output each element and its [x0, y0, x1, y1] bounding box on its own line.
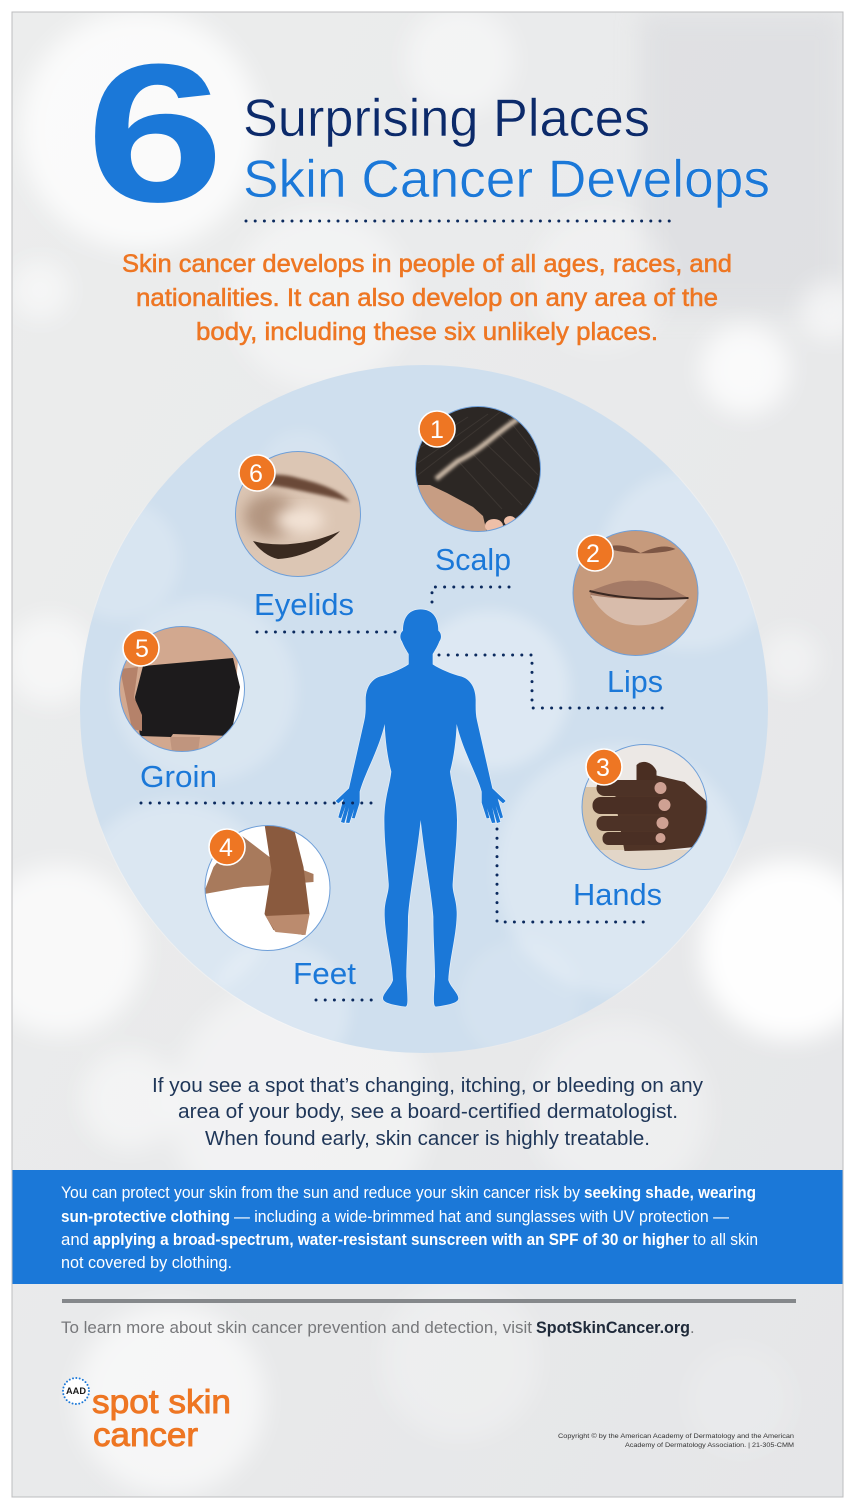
body part labels: Groin: [140, 759, 217, 794]
number badges: 5: [135, 635, 149, 663]
body part labels: Feet: [293, 956, 356, 991]
number badges: 2: [586, 540, 600, 568]
number badges: [123, 411, 622, 865]
intro text: nationalities. It can also develop on any area of the: [136, 284, 718, 312]
title: Surprising Places: [243, 89, 650, 148]
number badges: 4: [219, 834, 233, 862]
panel: sun protection band: sun-protective clothing: [61, 1208, 230, 1226]
advice text: If you see a spot that’s changing, itching, or bleeding on any: [152, 1074, 704, 1097]
title: [243, 89, 770, 209]
photo: lips: [572, 530, 698, 656]
intro text: Skin cancer develops in people of all ages, races, and: [122, 250, 732, 278]
advice text: When found early, skin cancer is highly treatable.: [205, 1127, 650, 1150]
number badges: 3: [596, 754, 610, 782]
copyright: Copyright © by the American Academy of Dermatology and the American: [558, 1432, 794, 1440]
panel: sun protection band: to all skin: [693, 1231, 758, 1249]
logo: AAD spot skin cancer: [63, 1378, 231, 1453]
body part labels: Lips: [607, 664, 663, 699]
panel: sun protection band: applying a broad-spectrum, water-resistant sunscreen with an SPF of 30 or higher: [93, 1231, 690, 1249]
learn more line: To learn more about skin cancer prevention and detection, visit: [61, 1319, 532, 1337]
body part labels: Scalp: [435, 542, 511, 577]
panel: sun protection band: [12, 1170, 843, 1284]
copyright: [558, 1432, 794, 1449]
photo: feet: [204, 824, 330, 951]
connector lines: [141, 587, 665, 1000]
advice text: [152, 1074, 704, 1150]
photo: scalp: [415, 406, 541, 533]
intro text: body, including these six unlikely places.: [196, 318, 658, 346]
learn more line: SpotSkinCancer.org: [536, 1319, 690, 1337]
logo: AAD spot skin cancer: AAD: [66, 1386, 86, 1397]
title: Skin Cancer Develops: [243, 150, 770, 209]
logo: AAD spot skin cancer: spot skin: [92, 1383, 231, 1420]
intro text: [122, 250, 732, 346]
big "6" numeral: 6: [86, 23, 224, 243]
number badges: 1: [430, 416, 444, 444]
panel: sun protection band: seeking shade, wearing: [584, 1184, 756, 1202]
panel: sun protection band: — including a wide-brimmed hat and sunglasses with UV protection —: [234, 1208, 729, 1226]
photo: groin: [119, 626, 248, 752]
number badges: 6: [249, 460, 263, 488]
panel: sun protection band: and: [61, 1231, 89, 1249]
advice text: area of your body, see a board-certified dermatologist.: [178, 1100, 678, 1123]
panel: sun protection band: You can protect your skin from the sun and reduce your skin cancer risk by: [61, 1184, 581, 1202]
body silhouette: [336, 609, 506, 1007]
photo: hands: [582, 744, 708, 877]
photo: eyelids: [235, 451, 361, 577]
copyright: Academy of Dermatology Association. | 21-305-CMM: [625, 1442, 794, 1449]
body part labels: Hands: [573, 877, 662, 912]
learn more line: .: [690, 1319, 695, 1337]
body part labels: Eyelids: [254, 587, 354, 622]
large body-map circle: [60, 365, 780, 1080]
panel: sun protection band: not covered by clothing.: [61, 1254, 232, 1272]
logo: AAD spot skin cancer: cancer: [93, 1416, 198, 1453]
body part labels: [140, 542, 663, 991]
